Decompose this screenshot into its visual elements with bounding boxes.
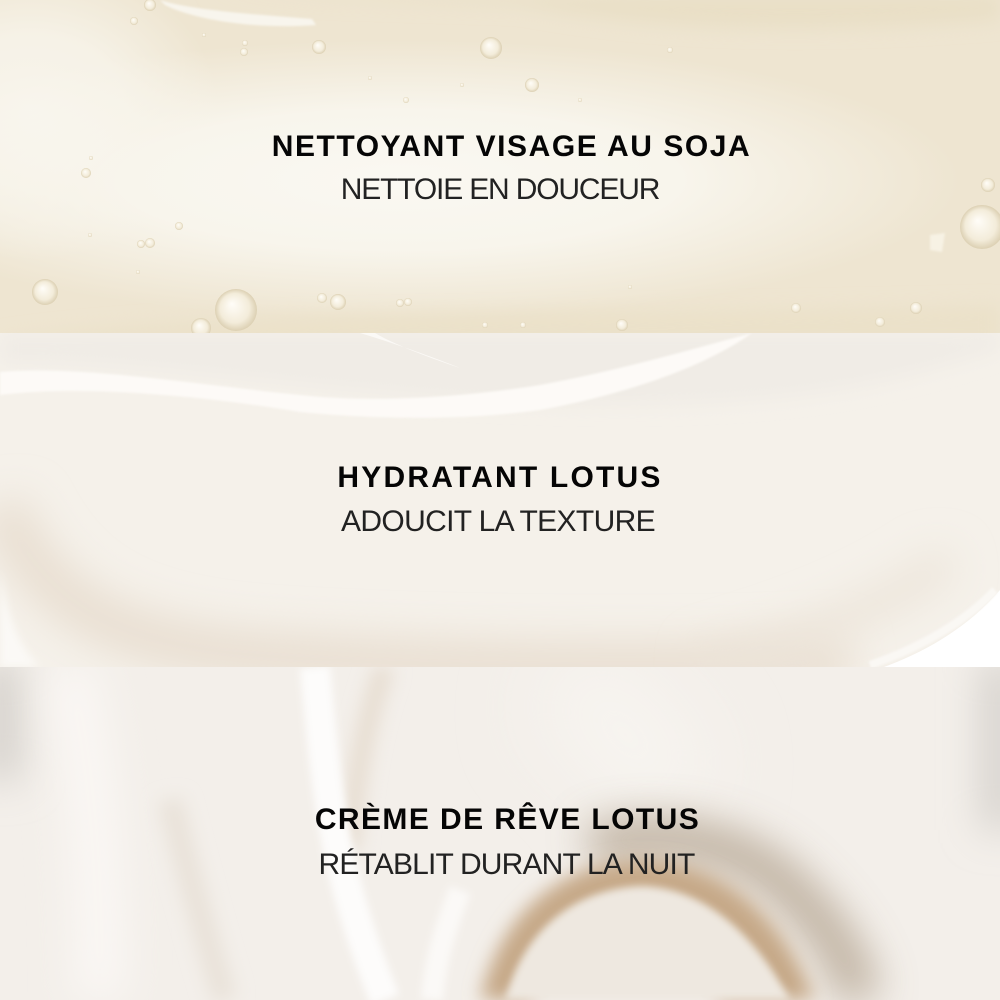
icon: glossy highlight (160, 0, 316, 26)
icon: white glossy streak (315, 667, 385, 1000)
icon: bubbles (32, 0, 1000, 338)
subtext: moisturizer: ADOUCIT LA TEXTURE (341, 505, 655, 538)
panel: lotus moisturizer texture (0, 333, 1000, 667)
panel: lotus dream cream texture (0, 660, 1000, 1000)
icon: glossy highlight band (0, 333, 752, 418)
icon: bowl shading (0, 505, 850, 666)
panel: soy cleanser texture (0, 0, 1000, 345)
subtext: cleanser: NETTOIE EN DOUCEUR (341, 173, 659, 206)
heading: moisturizer: HYDRATANT LOTUS (337, 461, 663, 494)
subtext: dream cream: RÉTABLIT DURANT LA NUIT (318, 848, 694, 881)
icon: caramel swirl shadow (480, 838, 860, 1000)
heading: dream cream: CRÈME DE RÊVE LOTUS (315, 803, 700, 836)
heading: cleanser: NETTOYANT VISAGE AU SOJA (272, 130, 751, 163)
